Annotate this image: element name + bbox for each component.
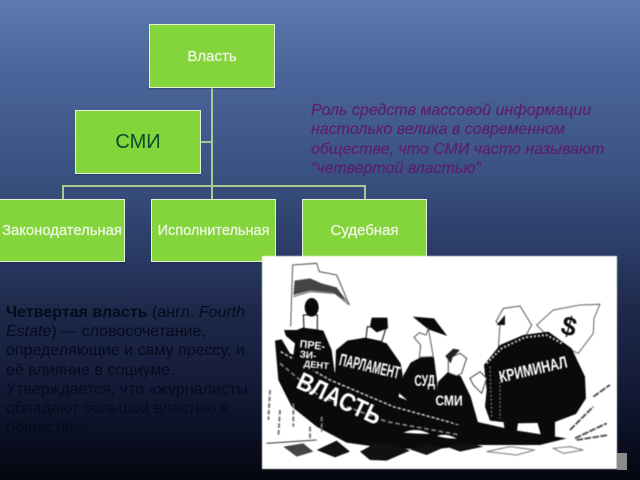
org box: Законодательная: Законодательная bbox=[2, 222, 122, 238]
figure: president: ДЕНТ bbox=[303, 359, 330, 371]
org box: Законодательная bbox=[0, 199, 125, 262]
org chart connectors bbox=[62, 88, 366, 199]
org box: Судебная bbox=[302, 199, 427, 261]
figure: criminal: КРИМИНАЛ bbox=[497, 352, 569, 387]
figure: criminal bbox=[470, 306, 586, 439]
money sack: $ bbox=[558, 310, 580, 343]
callout text: role of mass media bbox=[311, 102, 604, 177]
callout text: role of mass media: настолько велика в современном bbox=[311, 121, 565, 138]
figure: court: СУД bbox=[414, 373, 435, 390]
org box: СМИ bbox=[75, 110, 201, 174]
org box: Исполнительная bbox=[151, 199, 276, 262]
figure: media: СМИ bbox=[435, 393, 463, 409]
waves and splashes bbox=[267, 385, 610, 461]
figure: president: ЗИ- bbox=[299, 349, 317, 362]
callout text: role of mass media: Роль средств массовой информации bbox=[311, 102, 591, 119]
figure: president bbox=[284, 298, 335, 375]
definition text block: Утверждается, что «журналисты bbox=[6, 381, 248, 398]
boat hull bbox=[275, 339, 567, 449]
org box: Власть bbox=[149, 24, 275, 88]
cartoon background bbox=[262, 256, 617, 469]
callout text: role of mass media: “четвертой властью” bbox=[311, 160, 481, 177]
hull title: ВЛАСТЬ bbox=[292, 367, 386, 431]
watermark remnant bbox=[617, 453, 627, 470]
figure: president: ПРЕ- bbox=[299, 338, 326, 353]
figure: parliament bbox=[335, 318, 403, 398]
definition text block: Estate) — словосочетание, bbox=[6, 323, 206, 340]
figure: court bbox=[399, 317, 447, 416]
definition text block: Четвертая власть (англ. Fourth bbox=[6, 304, 245, 321]
org box: Исполнительная: Исполнительная bbox=[158, 222, 269, 238]
callout text: role of mass media: обществе, что СМИ часто называют bbox=[311, 141, 604, 158]
org box: Власть: Власть bbox=[187, 48, 237, 64]
definition text block: обществе» bbox=[6, 419, 87, 436]
figure: parliament: ПАРЛАМЕНТ bbox=[337, 349, 402, 383]
org box: Судебная: Судебная bbox=[330, 222, 399, 238]
definition text block: определяющие и саму прессу, и bbox=[6, 342, 245, 359]
money sack bbox=[537, 304, 600, 353]
definition text block: её влияние в социуме. bbox=[6, 362, 175, 379]
figure: media bbox=[432, 349, 478, 425]
org box: СМИ: СМИ bbox=[115, 130, 161, 152]
flag bbox=[291, 263, 349, 327]
definition text block: обладают большой властью в bbox=[6, 400, 229, 417]
definition text block bbox=[6, 304, 248, 436]
